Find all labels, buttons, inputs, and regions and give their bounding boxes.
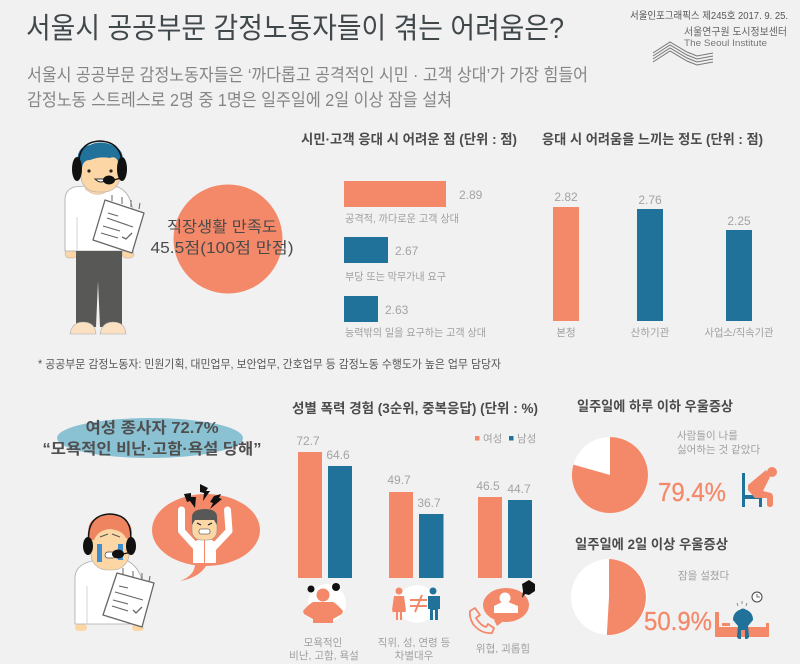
chart category labels: 모욕적인	[304, 637, 342, 649]
satisfaction circle	[150, 184, 294, 294]
subtitle	[27, 65, 588, 110]
chart category labels	[289, 636, 530, 662]
footnote: * 공공부문 감정노동자: 민원기획, 대민업무, 보안업무, 간호업무 등 감정노동 수행도가 높은 업무 담당자	[38, 357, 501, 371]
grouped bar chart: 72.7	[296, 434, 320, 448]
pie chart: 50.9%	[571, 559, 647, 635]
text: depression symptom 1	[677, 429, 760, 456]
legend	[475, 433, 536, 445]
horizontal bar chart: 능력밖의 일을 요구하는 고객 상대	[345, 326, 486, 339]
heading: one day depression: 일주일에 하루 이하 우울증상	[577, 399, 734, 414]
icon: threatening phone call	[470, 580, 535, 633]
icon: person on chair	[742, 467, 777, 507]
icon: clipboard	[103, 568, 154, 627]
icon: clipboard	[93, 195, 144, 253]
icon: gender inequality	[392, 585, 440, 623]
callout: women workers: 여성 종사자 72.7%	[86, 419, 219, 437]
callout: women workers: “모욕적인 비난·고함·욕설 당해”	[42, 440, 262, 458]
subtitle: 서울시 공공부문 감정노동자들은 ‘까다롭고 공격적인 시민 · 고객 상대’가 가장 힘들어	[27, 65, 588, 85]
satisfaction circle: 45.5점(100점 만점)	[150, 239, 294, 257]
stat: 50.9%: 50.9%	[644, 606, 712, 636]
pie chart: 79.4%	[572, 437, 648, 513]
chart category labels: 차별대우	[395, 650, 434, 662]
vertical bar chart: 사업소/직속기관	[704, 326, 774, 339]
publisher info and logo: 서울연구원 도시정보센터	[684, 26, 787, 38]
chart category labels: 비난, 고함, 욕설	[289, 650, 359, 662]
vertical bar chart: 2.25	[727, 214, 751, 228]
text: depression symptom 2: 잠을 설쳤다	[678, 570, 730, 582]
vertical bar chart: 산하기관	[631, 326, 670, 339]
grouped bar chart: 36.7	[417, 496, 441, 510]
heading: difficulty chart: 시민·고객 응대 시 어려운 점 (단위 : 점)	[301, 132, 517, 147]
vertical bar chart: 본청	[556, 327, 576, 339]
grouped bar chart: 44.7	[507, 482, 531, 496]
legend: 여성	[483, 433, 502, 445]
heading: gender violence chart: 성별 폭력 경험 (3순위, 중복응답) (단위 : %)	[292, 401, 538, 416]
horizontal bar chart: 2.89	[459, 188, 483, 202]
grouped bar chart: 49.7	[387, 473, 411, 487]
icon: sleepless person on bed	[715, 592, 769, 639]
horizontal bar chart: 2.67	[395, 244, 419, 258]
horizontal bar chart: 부당 또는 막무가내 요구	[345, 271, 446, 283]
publisher info and logo: 서울인포그래픽스 제245호 2017. 9. 25.	[630, 10, 788, 22]
text: depression symptom 1: 싫어하는 것 같았다	[677, 443, 760, 456]
heading: two days depression: 일주일에 2일 이상 우울증상	[575, 537, 729, 552]
heading: intensity chart: 응대 시 어려움을 느끼는 정도 (단위 : 점)	[542, 132, 763, 147]
horizontal bar chart: 공격적, 까다로운 고객 상대	[345, 212, 459, 225]
stat: 79.4%: 79.4%	[658, 477, 726, 507]
horizontal bar chart: 2.63	[385, 303, 409, 317]
icon: angry person	[303, 583, 346, 623]
legend: 남성	[517, 433, 536, 445]
publisher info and logo	[630, 10, 788, 65]
grouped bar chart: 64.6	[326, 448, 350, 462]
vertical bar chart: 2.76	[638, 193, 662, 207]
grouped bar chart	[296, 434, 532, 578]
icon: angry customer speech bubble	[152, 484, 260, 581]
publisher info and logo: The Seoul Institute	[684, 38, 767, 49]
illustration: smiling call worker	[65, 141, 144, 334]
satisfaction circle: 직장생활 만족도	[167, 218, 277, 236]
text: depression symptom 1: 사람들이 나를	[677, 429, 738, 442]
chart category labels: 직위, 성, 연령 등	[378, 636, 451, 649]
subtitle: 감정노동 스트레스로 2명 중 1명은 일주일에 2일 이상 잠을 설쳐	[27, 90, 452, 110]
vertical bar chart: 2.82	[554, 190, 578, 204]
horizontal bar chart	[344, 181, 486, 339]
title: 서울시 공공부문 감정노동자들이 겪는 어려움은?	[26, 13, 564, 45]
chart category labels: 위협, 괴롭힘	[476, 642, 530, 655]
grouped bar chart: 46.5	[476, 479, 500, 493]
illustration: crying call worker	[75, 514, 154, 631]
vertical bar chart	[553, 190, 774, 339]
callout: women workers	[42, 418, 262, 458]
